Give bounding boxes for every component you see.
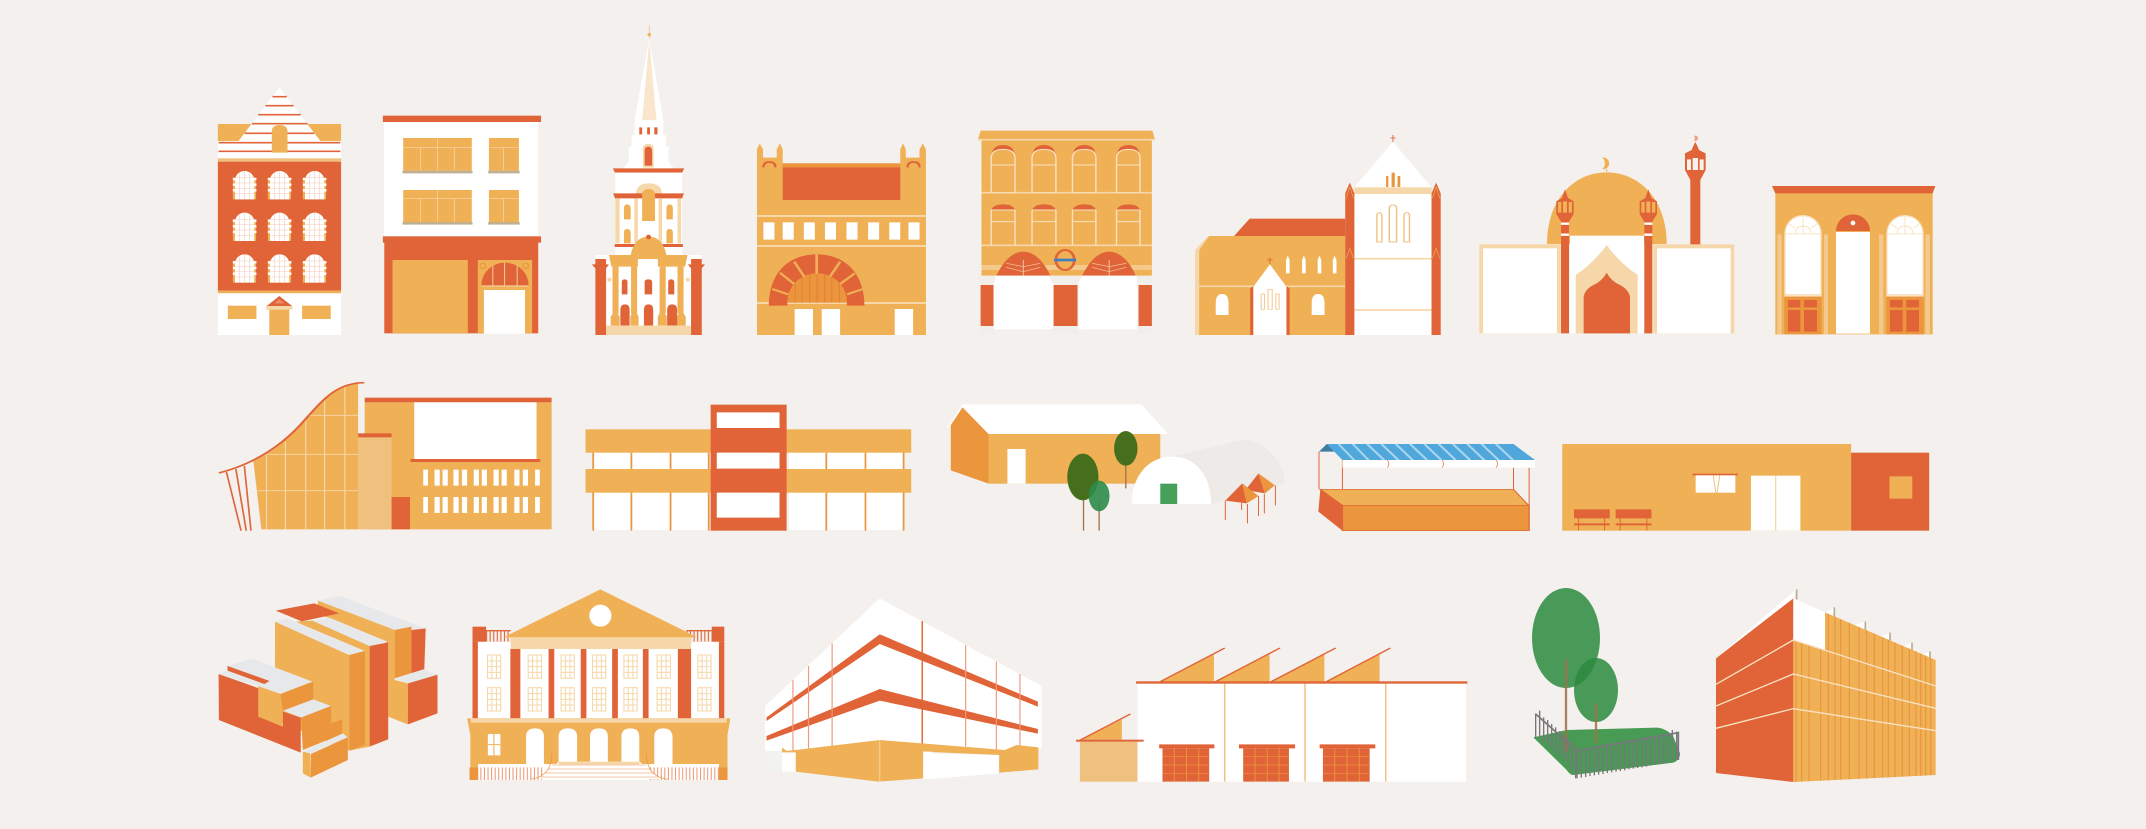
building: shopfront with white upper floors bbox=[383, 116, 541, 334]
window rows bbox=[423, 470, 540, 513]
building: sawtooth-roof factory bbox=[1076, 648, 1467, 782]
main slab bbox=[275, 603, 388, 751]
building: neoclassical hall with pediment bbox=[467, 589, 730, 780]
benches bbox=[1574, 509, 1651, 531]
brick arch bbox=[769, 254, 864, 306]
side shed bbox=[1076, 714, 1144, 782]
building: arched facade with red cornice bbox=[1772, 186, 1935, 334]
podium bbox=[782, 740, 1038, 782]
pediment bbox=[504, 589, 697, 649]
columns bbox=[510, 649, 691, 718]
building: isometric stacked blocks bbox=[219, 596, 437, 778]
ground floor bbox=[467, 718, 730, 767]
arcade bbox=[978, 252, 1154, 335]
upper windows bbox=[991, 145, 1140, 193]
building: perspective block with timber slats bbox=[1716, 589, 1936, 783]
central door bbox=[1836, 214, 1870, 334]
front small block bbox=[303, 733, 348, 778]
scene: garden with trees and fence bbox=[1532, 588, 1680, 778]
left window bbox=[1784, 215, 1822, 334]
building: brick townhouse with striped gable bbox=[218, 87, 341, 335]
building: low community hall with red annex bbox=[1562, 444, 1929, 531]
building: mosque with dome and minarets bbox=[1479, 136, 1734, 333]
scene: barn, polytunnel, trees and stalls bbox=[946, 404, 1285, 531]
small stalls bbox=[1225, 473, 1275, 523]
loading doors bbox=[1159, 744, 1375, 782]
rear tower bbox=[318, 596, 426, 680]
lower windows bbox=[991, 204, 1140, 245]
awning bbox=[1319, 444, 1535, 468]
upper windows bbox=[487, 655, 711, 711]
tower bbox=[1345, 135, 1441, 335]
slats bbox=[1796, 597, 1931, 783]
building: modernist block with red tower bbox=[586, 405, 911, 531]
lawn bbox=[1533, 728, 1680, 775]
side minarets bbox=[1556, 189, 1657, 333]
building: theatre with swooping roof bbox=[219, 383, 552, 531]
right window bbox=[1886, 215, 1924, 334]
porch bbox=[1250, 257, 1290, 335]
sawtooth roof bbox=[1136, 648, 1467, 684]
red tower bbox=[711, 405, 787, 531]
barn bbox=[946, 404, 1168, 484]
spire bbox=[624, 38, 674, 168]
platform bbox=[1318, 489, 1529, 531]
right box bbox=[388, 669, 437, 724]
frieze windows bbox=[763, 222, 920, 240]
minaret lantern bbox=[1685, 136, 1706, 180]
main portal bbox=[1576, 245, 1638, 333]
roundel bbox=[1054, 250, 1076, 270]
trees bbox=[1532, 588, 1618, 752]
windows bbox=[233, 171, 326, 283]
building: white church with spire bbox=[592, 25, 705, 335]
balustrade bbox=[486, 620, 712, 652]
building: white office in perspective with red bands bbox=[765, 598, 1042, 782]
building: market stall with blue awning bbox=[1318, 444, 1535, 531]
fence bbox=[1536, 711, 1678, 778]
trees bbox=[1067, 431, 1138, 531]
building: parish church with tower bbox=[1195, 135, 1441, 335]
building: Victorian hall with great arch bbox=[757, 143, 926, 335]
nave windows bbox=[1216, 256, 1336, 315]
illustration: grid of buildings bbox=[218, 25, 1936, 782]
stairs bbox=[470, 753, 727, 780]
polytunnel bbox=[1132, 439, 1285, 504]
building: underground station with arcade bbox=[978, 131, 1155, 335]
left block bbox=[219, 659, 342, 753]
